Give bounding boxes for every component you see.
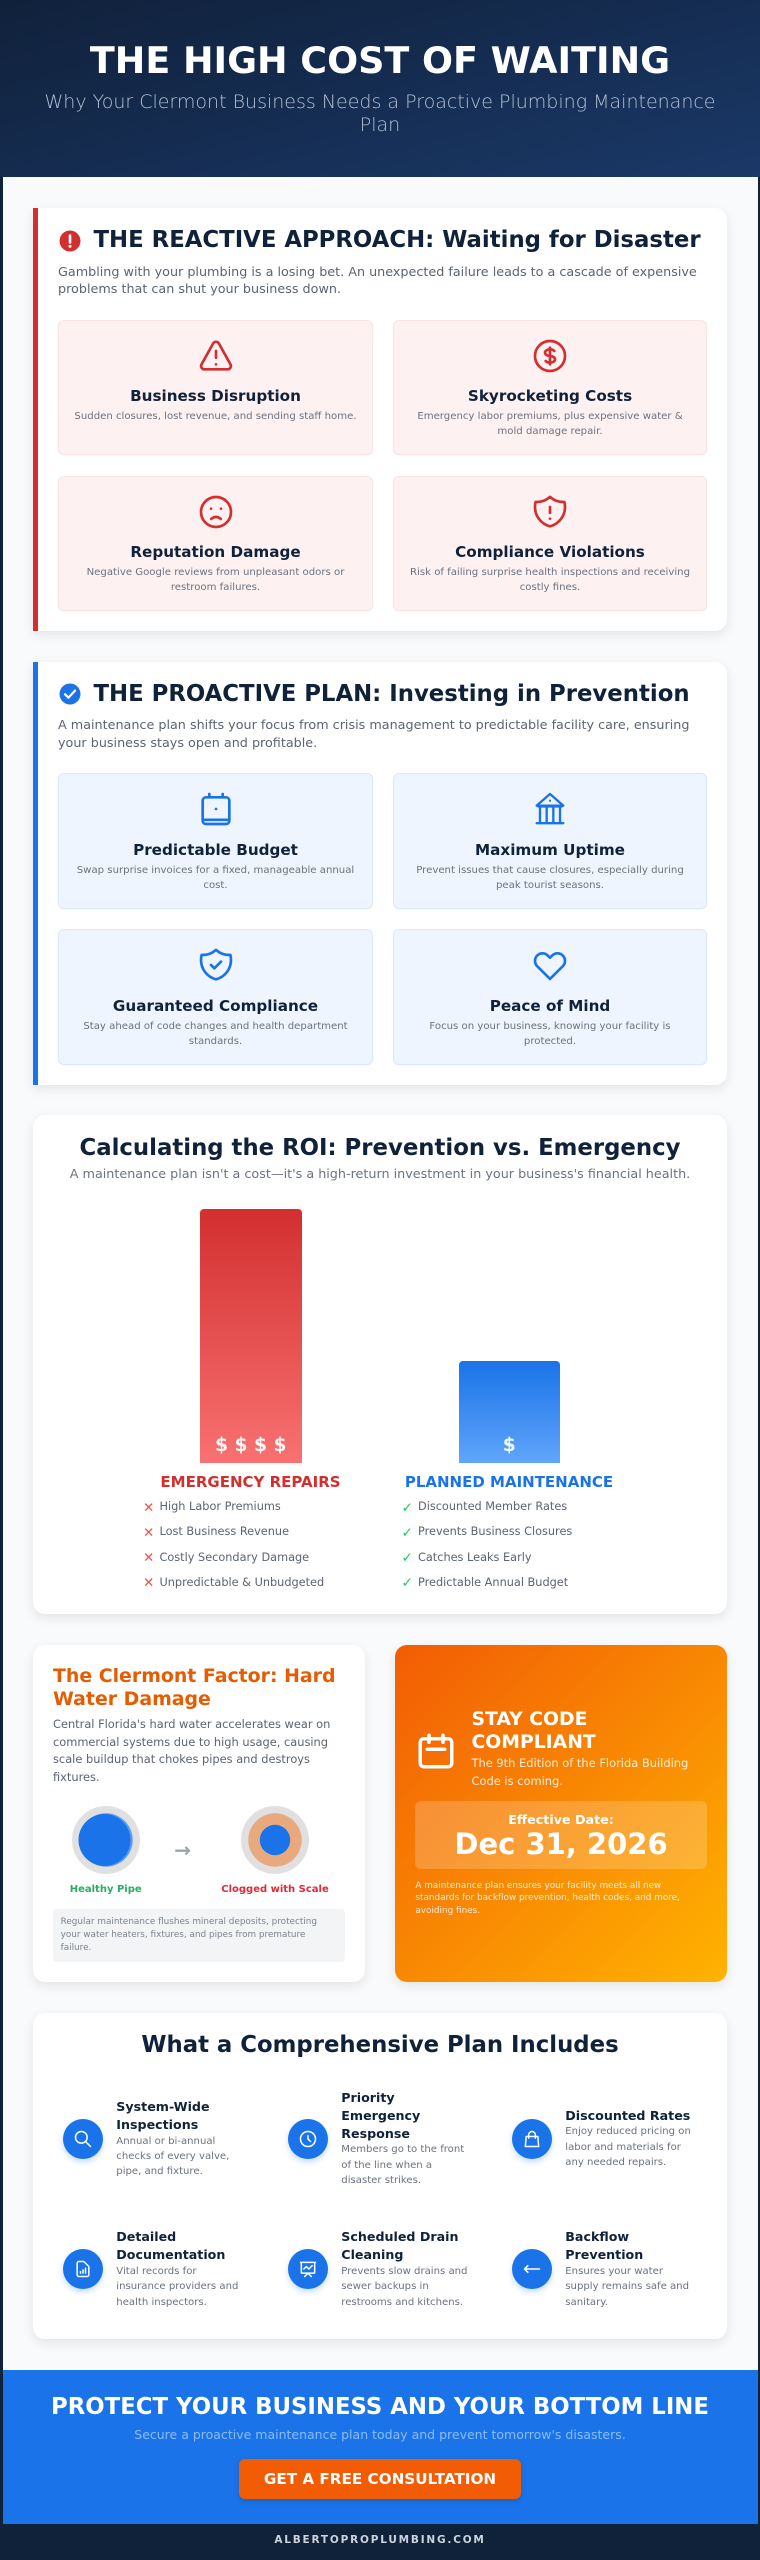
text: building code: The 9th Edition of the Florida Building [472,1756,688,1770]
panel: plan includes [33,2012,727,2339]
call to action [2,2370,758,2524]
list: maintenance benefits: Catches Leaks Early [418,1551,532,1564]
item: backflow prevention: Backflow [565,2229,629,2244]
item: discounted rates: labor and materials for [565,2142,681,2153]
card: business disruption [58,320,373,455]
title: THE HIGH COST OF WAITING [90,39,670,82]
panel: proactive plan [33,662,727,1085]
heading: ROI: Calculating the ROI: Prevention vs. Emergency [79,1135,680,1161]
list: maintenance benefits: Predictable Annual Budget [418,1576,568,1589]
item: emergency response: disaster strikes. [341,2175,421,2186]
card: reputation damage: Negative Google reviews from unpleasant odors or [87,566,344,578]
text: proactive intro [58,718,689,751]
item: documentation: Detailed [116,2229,176,2244]
card: compliance violations: Compliance Violations [455,542,645,560]
item: backflow prevention [509,2229,689,2308]
text: hard water: commercial systems due to high usage, causing [53,1735,328,1749]
item: documentation: insurance providers and [116,2281,238,2292]
arrow: → [174,1838,191,1862]
heading: plan includes: What a Comprehensive Plan Includes [141,2032,619,2058]
text: proactive intro: your business stays open and profitable. [58,736,317,751]
list: emergency drawbacks: Lost Business Revenue [160,1525,289,1538]
item: emergency response: Response [341,2126,410,2141]
card: guaranteed compliance [58,929,373,1065]
list: maintenance benefits: ✓ [402,1525,413,1541]
label: emergency repairs: EMERGENCY REPAIRS [160,1473,341,1491]
item: inspections: checks of every valve, [116,2151,229,2162]
heading: proactive plan: THE PROACTIVE PLAN: Investing in Prevention [94,681,690,707]
card: predictable budget: cost. [203,880,228,891]
item: inspections [60,2099,229,2177]
text: hard water [53,1717,330,1784]
callout: effective date: Effective Date: [508,1812,614,1827]
text: ROI subtitle: A maintenance plan isn't a cost—it's a high-return investment in your business's financial health. [70,1167,690,1182]
card: skyrocketing costs: Skyrocketing Costs [468,387,632,405]
list: emergency drawbacks: ✕ [143,1575,154,1591]
card: reputation damage: restroom failures. [171,582,260,593]
callout: effective date [415,1801,707,1869]
card: skyrocketing costs: Emergency labor premiums, plus expensive water & [417,411,683,422]
panel: hard water [33,1645,365,1982]
list: emergency drawbacks [143,1500,324,1591]
item: discounted rates: any needed repairs. [565,2157,666,2168]
text: proactive intro: A maintenance plan shifts your focus from crisis management to predictable facility care, ensuring [58,718,689,733]
item: backflow prevention: Prevention [565,2247,643,2262]
list: emergency drawbacks: Unpredictable & Unbudgeted [160,1576,324,1589]
card: skyrocketing costs [393,320,707,455]
note: regular maintenance: failure. [61,1943,91,1953]
card: predictable budget: Predictable Budget [133,841,298,859]
heading: reactive approach: THE REACTIVE APPROACH: Waiting for Disaster [94,227,701,253]
header [0,0,760,177]
card: maximum uptime [393,773,707,909]
item: emergency response: Priority [341,2090,395,2105]
item: inspections: Annual or bi-annual [116,2136,215,2147]
item: emergency response: Emergency [341,2108,420,2123]
card: reputation damage: Reputation Damage [130,542,301,560]
icon: alert circle [60,230,80,252]
card: peace of mind: Focus on your business, knowing your facility is [429,1021,671,1032]
item: drain cleaning: sewer backups in [341,2281,429,2292]
text: reactive intro [58,265,697,297]
list: emergency drawbacks: ✕ [143,1500,154,1516]
text: hard water: scale buildup that chokes pipes and destroys [53,1752,310,1766]
subtitle: Why Your Clermont Business Needs a Proactive Plumbing Maintenance [44,91,716,113]
item: documentation: Vital records for [116,2266,197,2277]
item: backflow prevention: Ensures your water [565,2266,663,2277]
label: planned maintenance: PLANNED MAINTENANCE [405,1473,613,1491]
text: compliance note: avoiding fines. [415,1906,480,1916]
note: regular maintenance [53,1909,345,1962]
note: regular maintenance: your water heaters, fixtures, and pipes from premature [61,1930,305,1940]
list: emergency drawbacks: ✕ [143,1550,154,1566]
list: maintenance benefits: ✓ [402,1575,413,1591]
heading: stay code compliant [472,1709,596,1753]
card: skyrocketing costs: mold damage repair. [497,426,603,437]
card: maximum uptime: peak tourist seasons. [496,880,604,891]
list: maintenance benefits: Discounted Member Rates [418,1500,567,1513]
card: compliance violations [393,476,707,611]
card: predictable budget: Swap surprise invoices for a fixed, manageable annual [77,865,354,876]
item: emergency response [285,2090,464,2186]
item: emergency response: Members go to the front [341,2144,464,2155]
text: reactive intro: Gambling with your plumbing is a losing bet. An unexpected failure leads to a cascade of expensive [58,265,697,280]
callout: effective date: Dec 31, 2026 [454,1827,668,1861]
subtitle [44,91,716,136]
list: emergency drawbacks: Costly Secondary Damage [160,1551,309,1564]
item: drain cleaning: Scheduled Drain [341,2229,458,2244]
footer [0,2524,760,2560]
text: CTA subtitle: Secure a proactive maintenance plan today and prevent tomorrow's disasters. [134,2427,626,2442]
diagram: clogged pipe [241,1806,309,1874]
panel: reactive approach [33,208,727,631]
bar: emergency repairs [200,1209,302,1462]
text: hard water: fixtures. [53,1770,100,1784]
card: guaranteed compliance: Stay ahead of code changes and health department [83,1021,348,1032]
item: inspections: System-Wide [116,2099,210,2114]
list: maintenance benefits: ✓ [402,1550,413,1566]
list: emergency drawbacks: ✕ [143,1525,154,1541]
heading: stay code compliant: COMPLIANT [472,1732,596,1753]
card: peace of mind: Peace of Mind [490,997,610,1015]
item: drain cleaning: Prevents slow drains and [341,2266,467,2277]
item: drain cleaning [285,2229,467,2308]
text: building code: Code is coming. [472,1774,563,1788]
text: reactive intro: problems that can shut your business down. [58,282,341,297]
card: guaranteed compliance: standards. [189,1036,242,1047]
diagram: healthy pipe [72,1806,140,1874]
bar: planned maintenance [458,1361,560,1462]
card: business disruption: Business Disruption [130,387,301,405]
item: drain cleaning: restrooms and kitchens. [341,2297,463,2308]
list: maintenance benefits: Prevents Business Closures [418,1525,572,1538]
button [239,2459,521,2499]
card: maximum uptime: Prevent issues that cause closures, especially during [416,865,684,876]
panel: ROI chart [33,1115,727,1614]
item: backflow prevention: sanitary. [565,2297,608,2308]
footer: ALBERTOPROPLUMBING.COM [274,2534,486,2546]
item: documentation: Documentation [116,2247,225,2262]
card: compliance violations: costly fines. [520,582,580,593]
card: compliance violations: Risk of failing surprise health inspections and receiving [410,566,690,578]
note: regular maintenance: Regular maintenance flushes mineral deposits, protecting [61,1917,317,1927]
label: clogged: Clogged with Scale [221,1884,329,1895]
item: backflow prevention: supply remains safe and [565,2281,689,2292]
icon: check circle [60,684,80,704]
label: healthy pipe: Healthy Pipe [70,1884,142,1895]
list: maintenance benefits [402,1500,572,1591]
icon: calendar [418,1734,454,1768]
item: inspections: Inspections [116,2117,198,2132]
text: compliance note: standards for backflow prevention, health codes, and more, [415,1893,680,1903]
item: discounted rates: Discounted Rates [565,2108,690,2122]
card: maximum uptime: Maximum Uptime [475,841,625,859]
item: emergency response: of the line when a [341,2160,432,2171]
list: emergency drawbacks: High Labor Premiums [160,1500,281,1513]
bar: emergency repairs: $ $ $ $ [215,1435,287,1456]
card: reputation damage [58,476,373,611]
item: discounted rates: Enjoy reduced pricing on [565,2126,691,2137]
heading: Clermont factor: Water Damage [53,1688,211,1710]
button: GET A FREE CONSULTATION [264,2470,496,2488]
heading: stay code compliant: STAY CODE [472,1709,587,1730]
item: discounted rates [509,2108,691,2168]
item: documentation: health inspectors. [116,2297,207,2308]
text: hard water: Central Florida's hard water accelerates wear on [53,1717,330,1731]
item: documentation [60,2229,238,2308]
card: peace of mind: protected. [524,1036,576,1047]
panel: stay code compliant [395,1645,727,1982]
text: compliance note [415,1881,680,1916]
card: peace of mind [393,929,707,1065]
item: drain cleaning: Cleaning [341,2247,403,2262]
bar: planned maintenance: $ [503,1435,516,1456]
item: inspections: pipe, and fixture. [116,2166,203,2177]
text: compliance note: A maintenance plan ensures your facility meets all new [415,1881,661,1891]
card: business disruption: Sudden closures, lost revenue, and sending staff home. [74,411,357,422]
heading: CTA: PROTECT YOUR BUSINESS AND YOUR BOTTOM LINE [51,2394,709,2420]
heading: Clermont factor [53,1664,336,1710]
card: guaranteed compliance: Guaranteed Compliance [113,997,318,1015]
subtitle: Plan [360,114,400,136]
list: maintenance benefits: ✓ [402,1500,413,1516]
card: predictable budget [58,773,373,909]
text: building code [471,1756,688,1788]
heading: Clermont factor: The Clermont Factor: Hard [53,1664,336,1686]
